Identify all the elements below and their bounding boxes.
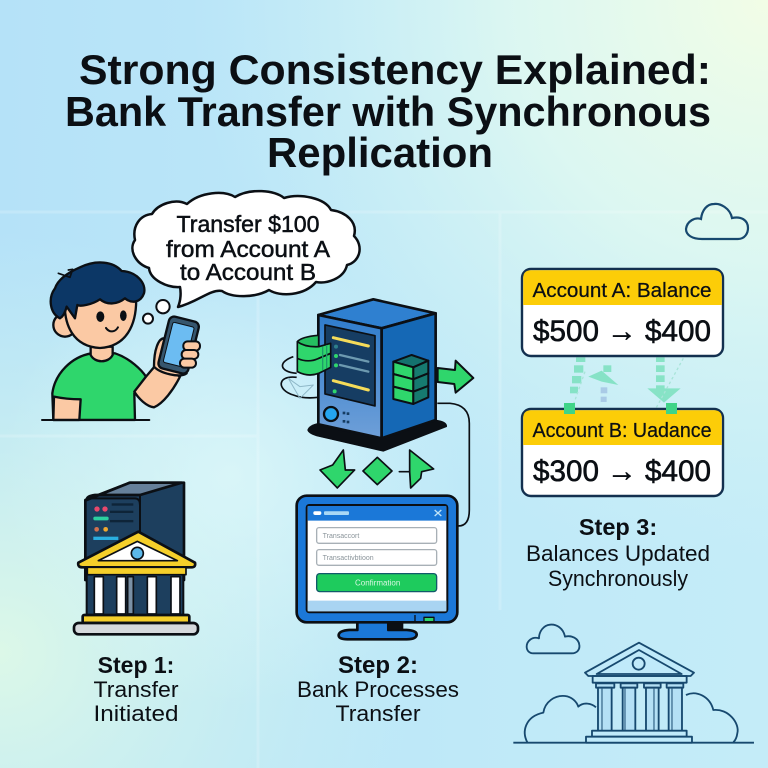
ground line	[42, 417, 149, 423]
monitor	[297, 496, 457, 622]
card: account A: $500 → $400	[533, 315, 711, 348]
bubble text: to Account B	[180, 259, 316, 285]
bubble text: Transfer $100	[176, 211, 320, 237]
step 1 label: Transfer	[94, 677, 178, 702]
title: Replication	[267, 129, 493, 176]
step 2 label: Bank Processes	[297, 677, 459, 702]
fingers	[180, 341, 200, 368]
power button	[324, 407, 338, 421]
step 1 label: Step 1:	[98, 652, 174, 678]
step 2 label: Transfer	[336, 701, 420, 726]
left bush	[525, 696, 596, 742]
swirl	[281, 357, 318, 398]
sync markers	[564, 403, 677, 414]
face	[65, 293, 136, 348]
small cloud	[527, 625, 579, 653]
arrow right	[438, 361, 473, 393]
icon: bank with server	[74, 483, 198, 634]
step 2 label: Step 2:	[338, 652, 418, 679]
title: Strong Consistency Explained:	[79, 46, 711, 93]
step 2 label	[297, 652, 459, 726]
step 3 label: Synchronously	[548, 566, 688, 591]
card: account B: Account B: Uadance	[532, 420, 712, 442]
step 3 label: Step 3:	[579, 514, 657, 540]
card: account A: Account A: Balance	[532, 280, 712, 302]
form labels: Confirmation	[355, 578, 400, 587]
form labels: Transactivbtioon	[323, 555, 374, 562]
title: Bank Transfer with Synchronous	[65, 88, 711, 135]
pediment	[78, 532, 195, 567]
right	[382, 313, 436, 438]
eyes	[96, 311, 104, 322]
smile	[106, 327, 118, 331]
thought dots	[143, 300, 170, 324]
card: account B: $300 → $400	[533, 455, 711, 488]
card: account B	[522, 409, 723, 496]
monitor stand	[339, 622, 417, 639]
ground	[513, 740, 754, 745]
step 3 label	[526, 514, 710, 591]
ear	[53, 313, 77, 337]
form labels: Transaccort	[323, 533, 359, 540]
speech bubble	[132, 191, 360, 307]
roof	[585, 643, 694, 676]
diamond	[363, 457, 392, 485]
server behind	[85, 483, 184, 580]
neck	[91, 347, 113, 361]
connector	[437, 403, 469, 526]
torso	[52, 353, 146, 420]
bubble text	[166, 211, 331, 285]
phone	[157, 315, 200, 375]
front	[318, 315, 382, 438]
sync connectors	[570, 357, 683, 410]
icon: outlined bank and clouds	[513, 625, 754, 743]
title	[65, 46, 711, 176]
base	[83, 615, 189, 623]
arrow up	[399, 450, 434, 488]
columns	[596, 683, 683, 731]
step 3 label: Balances Updated	[526, 541, 710, 566]
server top	[318, 299, 436, 328]
database right	[393, 355, 428, 404]
card: account A	[522, 269, 723, 356]
arm	[134, 363, 180, 407]
base shadow	[308, 420, 447, 451]
icon: person with phone	[42, 262, 200, 420]
hair	[51, 262, 144, 318]
step 1 label: Initiated	[94, 701, 178, 726]
icon: cloud top right	[686, 204, 748, 239]
rack panel	[325, 325, 375, 406]
icon: server with database	[281, 299, 473, 639]
bubble text: from Account A	[166, 236, 331, 262]
form labels	[323, 533, 400, 587]
entablature	[593, 676, 687, 683]
arrow down	[320, 450, 355, 488]
step 1 label	[94, 652, 178, 726]
database left	[297, 335, 331, 375]
right bush	[686, 693, 738, 742]
steps	[592, 731, 687, 737]
columns back	[87, 573, 183, 615]
